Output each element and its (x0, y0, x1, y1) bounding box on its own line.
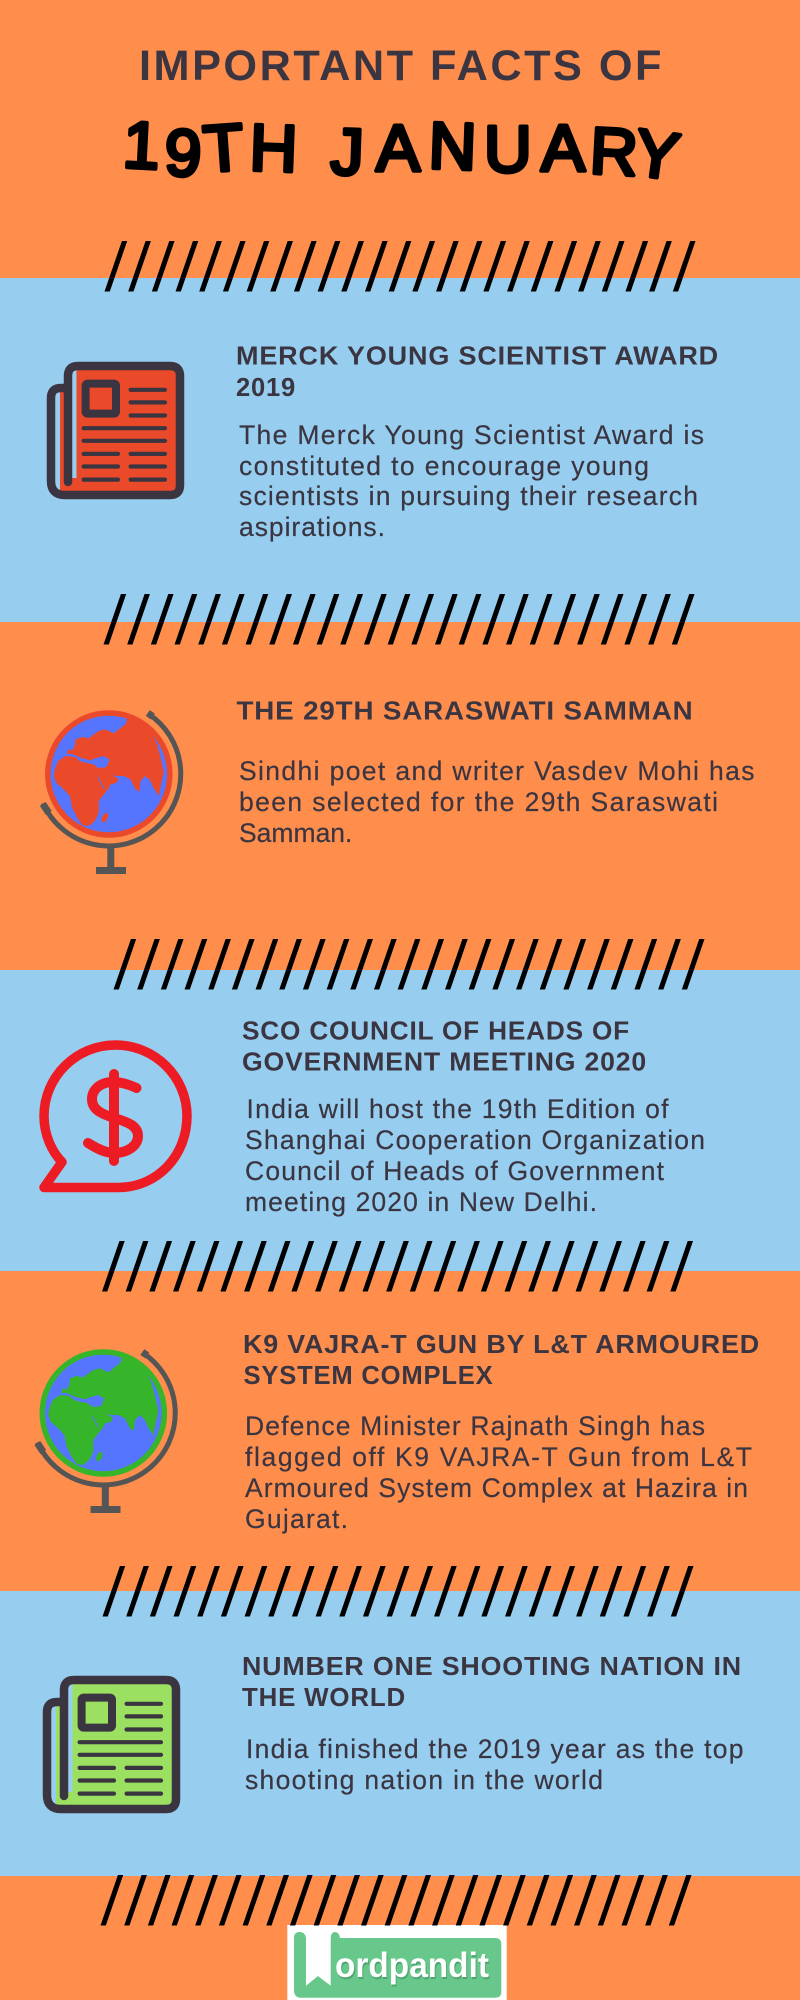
panel: sco council of heads of government meeting (0, 970, 800, 1271)
body text (245, 1094, 705, 1217)
body text: meeting 2020 in New Delhi. (245, 1187, 597, 1217)
icon: dollar speech bubble (44, 1045, 187, 1188)
body text: shooting nation in the world (245, 1765, 603, 1795)
heading: THE WORLD (242, 1682, 406, 1712)
body text: India will host the 19th Edition of (246, 1094, 669, 1124)
heading: K9 VAJRA-T GUN BY L&T ARMOURED (243, 1329, 760, 1359)
panel: the 29th saraswati samman (0, 622, 800, 970)
heading (236, 340, 719, 402)
title: important facts of: IMPORTANT FACTS OF (139, 42, 664, 90)
heading: THE 29TH SARASWATI SAMMAN (236, 696, 694, 726)
body text: Council of Heads of Government (245, 1156, 665, 1186)
body text: Defence Minister Rajnath Singh has (245, 1411, 705, 1441)
heading: MERCK YOUNG SCIENTIST AWARD (236, 340, 719, 370)
heading: NUMBER ONE SHOOTING NATION IN (242, 1651, 742, 1681)
body text: aspirations. (239, 512, 385, 542)
logo: wordpandit (287, 1925, 507, 2000)
icon: red newspaper (51, 366, 180, 495)
body text: scientists in pursuing their research (239, 481, 698, 511)
icon: green newspaper (47, 1680, 176, 1809)
body text: Armoured System Complex at Hazira in (245, 1473, 748, 1503)
panel: header (0, 0, 800, 278)
body text: Sindhi poet and writer Vasdev Mohi has (239, 756, 754, 786)
panel: merck young scientist award (0, 278, 800, 622)
body text (245, 1734, 744, 1795)
heading: SCO COUNCIL OF HEADS OF (242, 1016, 630, 1046)
body text: Samman. (239, 818, 352, 848)
body text: The Merck Young Scientist Award is (239, 420, 704, 450)
body text: been selected for the 29th Saraswati (239, 787, 718, 817)
heading (242, 1651, 742, 1712)
body text: constituted to encourage young (239, 451, 649, 481)
title: date in marker lettering: 19TH JANUARY (121, 107, 684, 194)
icon: red and blue globe (43, 710, 181, 874)
panel: number one shooting nation (0, 1591, 800, 1876)
body text: India finished the 2019 year as the top (246, 1734, 744, 1764)
panel: k9 vajra-t gun (0, 1271, 800, 1591)
body text (239, 756, 754, 848)
body text: Gujarat. (245, 1504, 348, 1534)
logo: wordpandit: ordpandit (335, 1946, 489, 1985)
body text (239, 420, 704, 542)
icon: green and blue globe (37, 1349, 175, 1513)
heading: 2019 (236, 372, 296, 402)
heading (243, 1329, 760, 1390)
body text (245, 1411, 752, 1534)
heading: GOVERNMENT MEETING 2020 (242, 1046, 647, 1076)
heading (242, 1016, 647, 1076)
body text: flagged off K9 VAJRA-T Gun from L&T (245, 1442, 752, 1472)
heading: SYSTEM COMPLEX (244, 1360, 494, 1390)
panel: footer (0, 1876, 800, 2000)
body text: Shanghai Cooperation Organization (245, 1125, 705, 1155)
